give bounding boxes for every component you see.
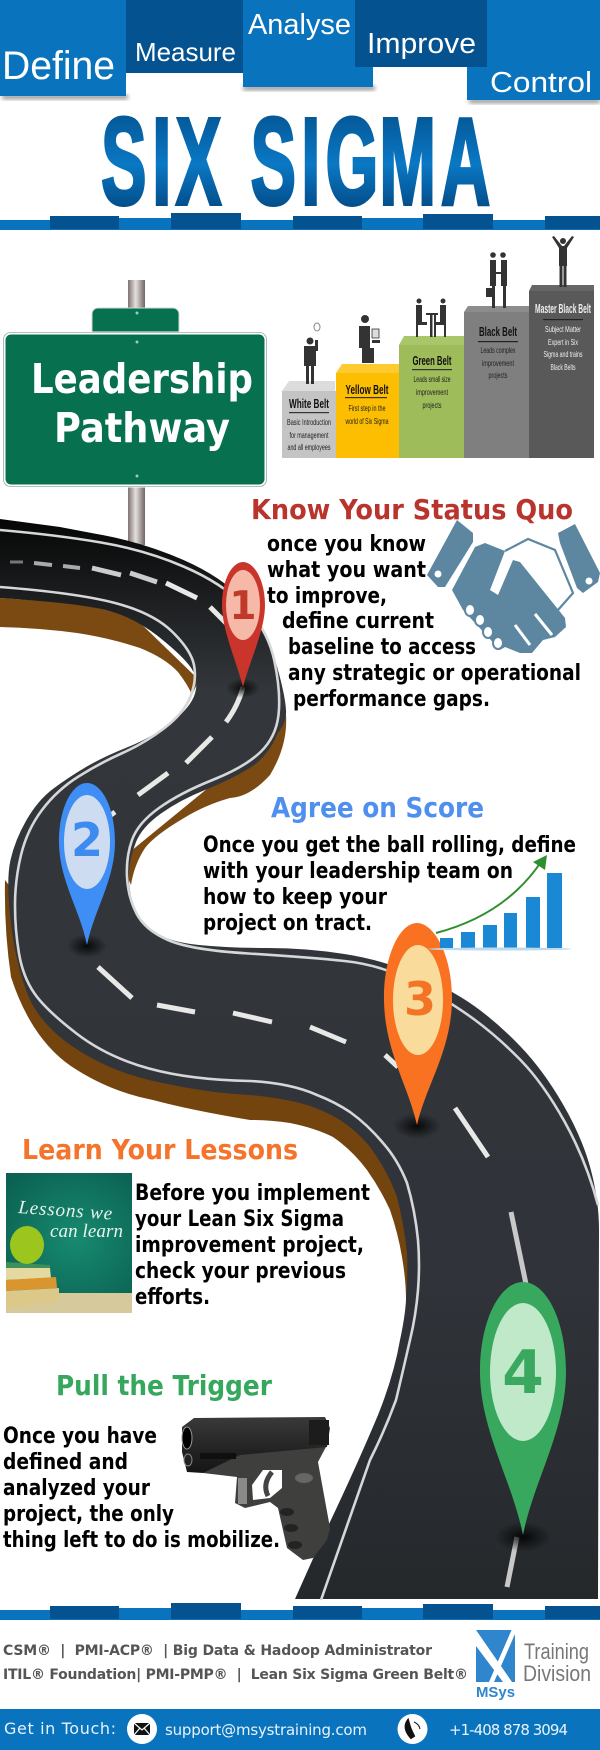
pin 3: 3 — [404, 972, 436, 1026]
step: Master Black Belt: Expert in Six — [548, 337, 578, 347]
step: White Belt — [282, 323, 336, 458]
pin 1 — [222, 562, 265, 698]
certification list — [3, 1643, 468, 1683]
sign text: Pathway — [54, 404, 230, 452]
section 2 body: how to keep your — [203, 884, 388, 910]
label: Improve: Improve — [367, 28, 476, 60]
section 1 heading: Know Your Status Quo — [251, 493, 573, 526]
top divider band — [0, 213, 600, 230]
step: Black Belt — [464, 252, 529, 458]
section 3 body: your Lean Six Sigma — [135, 1206, 344, 1232]
section 2 body — [203, 832, 576, 936]
step: Green Belt: improvement — [416, 387, 448, 397]
step: Master Black Belt: Black Belts — [550, 362, 576, 372]
section 4 body: defined and — [3, 1449, 128, 1475]
pin 4: 4 — [502, 1338, 544, 1408]
section 3 body — [135, 1180, 370, 1310]
phone number: +1-408 878 3094 — [449, 1721, 568, 1739]
step: Black Belt: projects — [488, 370, 508, 380]
step: Black Belt: Black Belt — [479, 324, 517, 339]
section 4 body: thing left to do is mobilize. — [3, 1527, 280, 1553]
step: White Belt: White Belt — [289, 396, 329, 411]
step: Black Belt: Leads complex — [480, 345, 516, 355]
section 1 body — [267, 531, 581, 712]
chalkboard image: Lessons we — [17, 1197, 113, 1225]
title: Six Sigma: SIGMA — [251, 94, 490, 231]
label: Analyse: Analyse — [248, 9, 351, 41]
road edge lines — [0, 530, 598, 1600]
pin 4 — [480, 1282, 566, 1552]
pin 3 — [384, 923, 452, 1139]
pistol image — [182, 1417, 330, 1560]
logo: MSys Training Division: MSys — [476, 1684, 515, 1701]
step: Green Belt: Leads small size — [414, 374, 451, 384]
step: White Belt: Basic Introduction — [287, 417, 331, 427]
chalkboard image: can learn — [50, 1221, 123, 1242]
step: Yellow Belt: world of Six Sigma — [345, 416, 389, 426]
growth bar chart icon — [428, 855, 572, 950]
label: Measure: Measure — [135, 37, 236, 67]
pin 2 — [59, 783, 115, 958]
road centre dashes — [10, 562, 526, 1587]
chalkboard image — [6, 1173, 132, 1313]
road sign: Leadership Pathway — [4, 280, 266, 545]
email: support@msystraining.com — [165, 1721, 367, 1739]
step: Green Belt — [399, 298, 464, 458]
section 2 body: project on tract. — [203, 910, 372, 936]
certification list: ITIL® Foundation| PMI-PMP® | Lean Six Sigma Green Belt® — [3, 1667, 468, 1683]
label: Define: Define — [2, 44, 115, 88]
step: White Belt: for management — [290, 430, 329, 440]
pin 1: 1 — [229, 584, 257, 629]
section 4 body — [3, 1423, 280, 1553]
step: Master Black Belt: Subject Matter — [545, 324, 581, 334]
step: Black Belt: improvement — [482, 358, 514, 368]
section 3 body: Before you implement — [135, 1180, 370, 1206]
logo: MSys Training Division: Division — [523, 1661, 591, 1686]
sign text: Leadership — [31, 355, 253, 403]
sign text — [31, 355, 253, 452]
logo: MSys Training Division — [476, 1622, 591, 1701]
contact bar — [0, 1709, 600, 1750]
step: Yellow Belt: First step in the — [348, 403, 386, 413]
section 1 body: baseline to access — [288, 634, 476, 660]
section 4 body: project, the only — [3, 1501, 174, 1527]
road with brown shoulders — [0, 519, 599, 1600]
section 1 body: once you know — [267, 531, 426, 557]
section 4 body: Once you have — [3, 1423, 157, 1449]
section 3 body: check your previous — [135, 1258, 346, 1284]
label: Control: Control — [490, 67, 592, 99]
step: Green Belt: projects — [422, 400, 442, 410]
section 1 body: to improve, — [267, 583, 387, 609]
step: White Belt: and all employees — [288, 442, 330, 452]
header: DMAIC blocks — [0, 0, 600, 103]
step: Master Black Belt — [529, 236, 594, 458]
footer divider band — [0, 1603, 600, 1620]
pin 2: 2 — [71, 813, 103, 867]
title: Six Sigma — [101, 94, 490, 231]
icon: handshake — [427, 520, 600, 653]
certification list: CSM® | PMI-ACP® | Big Data & Hadoop Administrator — [3, 1643, 432, 1659]
section 3 heading: Learn Your Lessons — [22, 1133, 298, 1166]
step: Yellow Belt — [336, 315, 399, 458]
title: Six Sigma: SIX — [101, 94, 221, 231]
step: Yellow Belt: Yellow Belt — [346, 382, 389, 397]
section 4 heading: Pull the Trigger — [56, 1369, 272, 1402]
section 1 body: define current — [282, 608, 434, 634]
step: Green Belt: Green Belt — [412, 353, 452, 368]
section 1 body: performance gaps. — [293, 686, 490, 712]
section 4 body: analyzed your — [3, 1475, 151, 1501]
section 3 body: efforts. — [135, 1284, 210, 1310]
contact label: Get in Touch: — [4, 1719, 116, 1738]
icon: phone — [398, 1714, 428, 1744]
section 3 body: improvement project, — [135, 1232, 364, 1258]
belt staircase chart — [282, 236, 594, 458]
icon: envelope — [127, 1714, 157, 1744]
section 2 body: with your leadership team on — [203, 858, 513, 884]
section 2 heading: Agree on Score — [271, 791, 484, 824]
section 1 body: what you want — [267, 557, 426, 583]
